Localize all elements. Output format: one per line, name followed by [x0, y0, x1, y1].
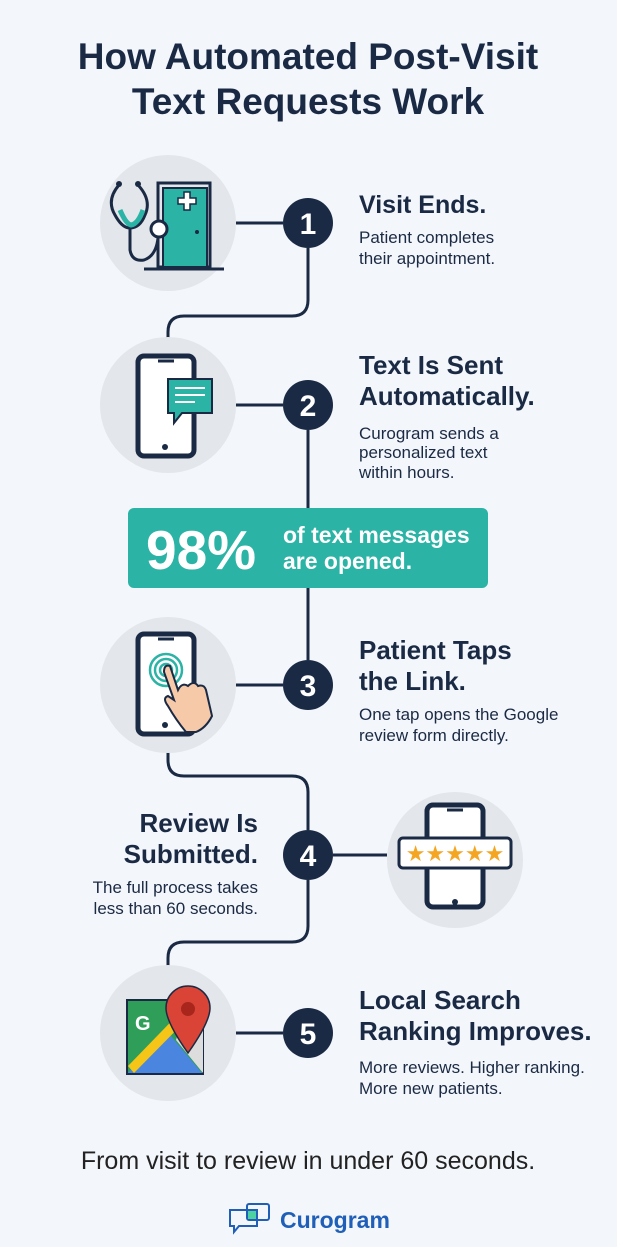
title: How Automated Post-Visit [78, 36, 538, 77]
icon: google maps: G [135, 1013, 151, 1035]
step 1 number [283, 198, 333, 248]
title: Text Requests Work [132, 81, 485, 122]
step 3 text: review form directly. [359, 726, 509, 745]
timeline connector [168, 223, 387, 1033]
step 4 text: less than 60 seconds. [94, 899, 258, 918]
icon: phone with stars: ★★★★★ [406, 842, 504, 867]
step 2 text: personalized text [359, 443, 488, 462]
step 3 text: Patient Taps [359, 635, 512, 665]
step 1 text: Visit Ends. [359, 191, 486, 219]
step 1 text [359, 191, 495, 268]
step 5 text: Ranking Improves. [359, 1016, 592, 1046]
step 2 text: within hours. [358, 463, 454, 482]
step 1 text: Patient completes [359, 228, 494, 247]
step 4 number [283, 830, 333, 880]
step 4 text [93, 808, 258, 918]
icon: stethoscope and door [100, 155, 236, 291]
step 4 text: Submitted. [124, 839, 258, 869]
step 1 text: their appointment. [359, 249, 495, 268]
step 4 text: Review Is [139, 808, 258, 838]
stat banner [128, 508, 488, 588]
icon: google maps [100, 965, 236, 1101]
step 5 text: More reviews. Higher ranking. [359, 1058, 585, 1077]
title [78, 36, 538, 122]
step 4 text: The full process takes [93, 878, 258, 897]
icon: phone with message [100, 337, 236, 473]
stat banner: are opened. [283, 548, 412, 574]
step 2 text: Text Is Sent [359, 350, 503, 380]
icon: phone tap [100, 617, 236, 753]
step 2 number: 2 [300, 390, 316, 423]
footer tagline: From visit to review in under 60 seconds. [81, 1147, 535, 1175]
logo: Curogram [280, 1207, 390, 1233]
step 5 text: Local Search [359, 985, 521, 1015]
stat banner: 98% [146, 519, 256, 581]
step 3 number [283, 660, 333, 710]
icon: phone with stars [387, 792, 523, 928]
step 2 text: Curogram sends a [359, 424, 499, 443]
step 2 number [283, 380, 333, 430]
step 3 text [359, 635, 558, 745]
step 5 number: 5 [300, 1018, 316, 1051]
step 1 number: 1 [300, 208, 316, 241]
logo [230, 1204, 390, 1233]
step 2 text: Automatically. [359, 381, 535, 411]
step 5 text: More new patients. [359, 1079, 503, 1098]
stat banner: of text messages [283, 522, 470, 548]
step 5 text [359, 985, 592, 1098]
step 3 text: the Link. [359, 666, 466, 696]
step 2 text [358, 350, 535, 482]
step 5 number [283, 1008, 333, 1058]
step 3 number: 3 [300, 670, 316, 703]
step 3 text: One tap opens the Google [359, 705, 558, 724]
step 4 number: 4 [300, 840, 317, 873]
